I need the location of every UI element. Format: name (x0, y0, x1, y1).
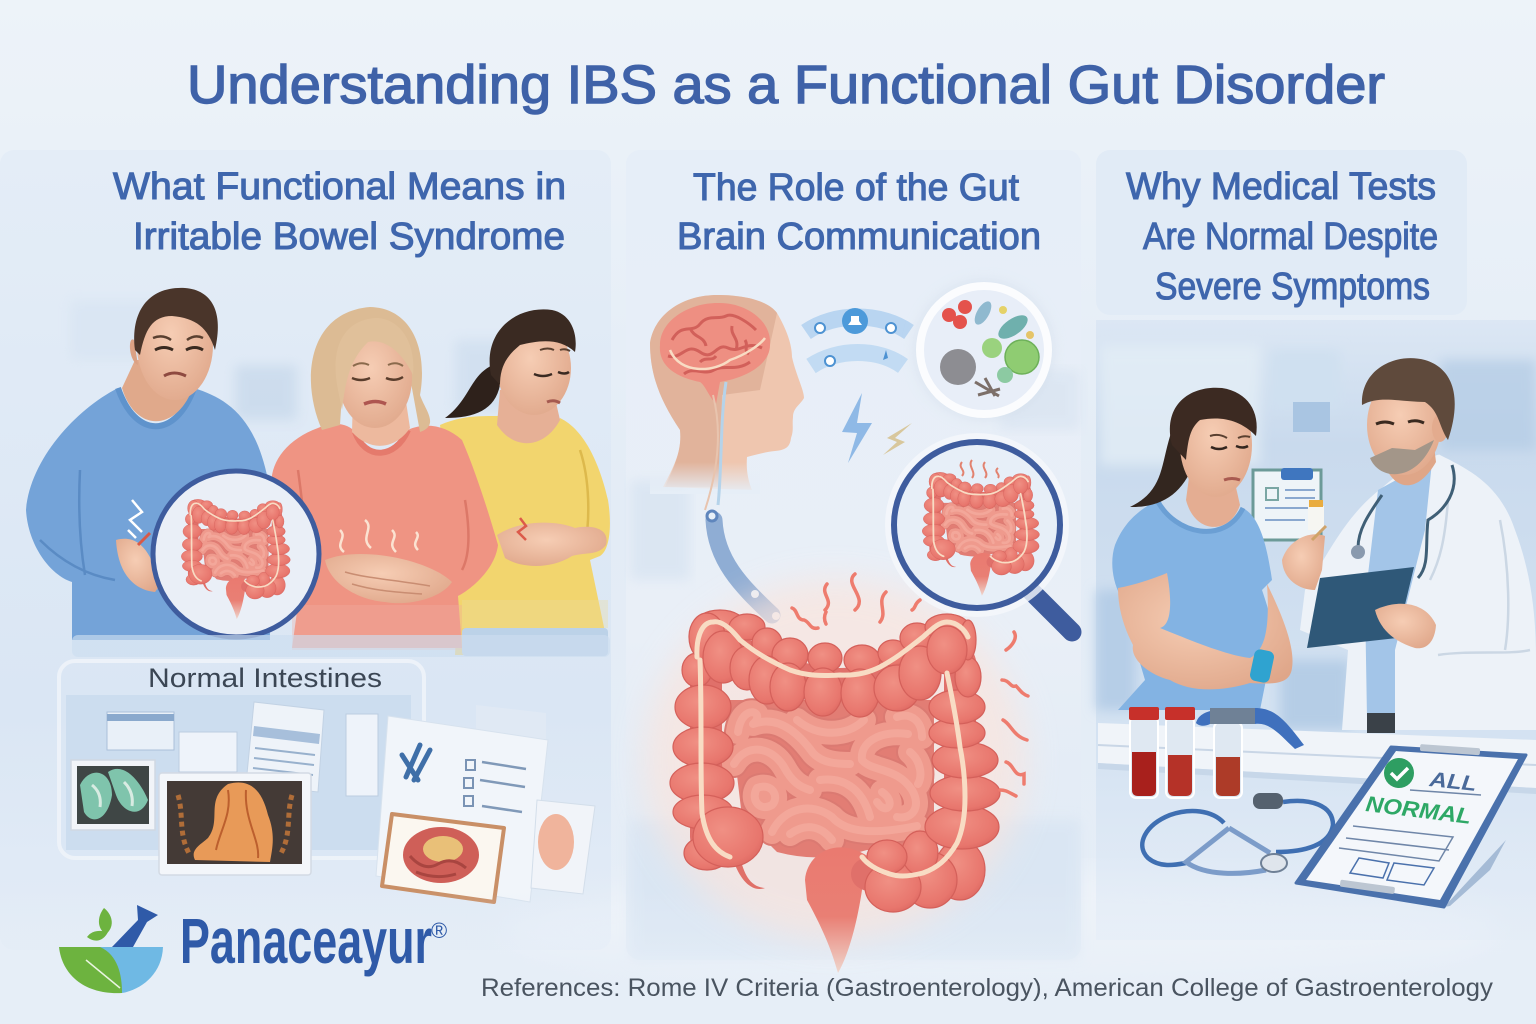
tube 2 (1165, 707, 1195, 798)
heading: right panel: Are Normal Despite (1143, 216, 1438, 258)
scan: green tissue image (71, 760, 155, 830)
figure: man in blue sweater (26, 288, 270, 640)
figure: woman in coral shirt (271, 307, 498, 650)
text: normal: NORMAL (1364, 791, 1473, 829)
icon: stethoscope (1142, 793, 1333, 873)
fade under figures (72, 635, 610, 657)
icon: heat squiggles (792, 574, 1028, 796)
references: References: Rome IV Criteria (Gastroenterology), American College of Gastroenterology (481, 974, 1494, 1002)
clipboard held by doctor (1307, 567, 1414, 648)
tube 1 (1129, 707, 1159, 798)
counter (1098, 723, 1536, 794)
icon: check mark (1384, 758, 1414, 788)
heading: left panel: Irritable Bowel Syndrome (133, 216, 565, 258)
scan: intestine photo card (382, 814, 504, 902)
panel: right column (1096, 150, 1536, 940)
wordmark: Panaceayur (180, 905, 432, 977)
arrows: brain-gut signals (806, 308, 909, 366)
title: Understanding IBS as a Functional Gut Disorder (187, 55, 1385, 115)
tube 3 (1214, 722, 1242, 798)
heading: middle panel: The Role of the Gut (693, 167, 1019, 209)
heading: left panel (113, 166, 566, 258)
wall chart: clinic clipboard (1253, 468, 1324, 540)
heading: middle panel (677, 167, 1041, 258)
text: all: ALL (1427, 768, 1478, 796)
icon: intestine badge (153, 471, 319, 637)
icon: lightning bolts (842, 393, 912, 463)
heading: middle panel: Brain Communication (677, 216, 1041, 258)
heading: right panel: Severe Symptoms (1155, 266, 1430, 308)
connector: gut-brain nerve (707, 511, 780, 620)
icon: blood test tubes (1129, 707, 1304, 798)
figure: doctor (1282, 358, 1536, 733)
heading: right panel: Why Medical Tests (1126, 166, 1436, 208)
icon: brain (660, 303, 770, 404)
figure: head profile with brain (650, 295, 804, 510)
icon: microbes circle (914, 280, 1054, 420)
figure: woman in yellow shirt (440, 309, 610, 656)
heading: right panel (1126, 166, 1438, 308)
documents: report sheets (107, 702, 595, 902)
illustration: large intestine (645, 580, 1025, 973)
arms crossed (1118, 573, 1293, 689)
label: normal intestines: Normal Intestines (148, 663, 382, 693)
panel: normal intestines reports (59, 661, 424, 858)
scan: tablet with orange colon image (159, 773, 311, 875)
logo: Panaceayur: ® (431, 918, 447, 943)
clipboard: all normal (1296, 744, 1526, 907)
logo: Panaceayur (59, 905, 447, 993)
heading: left panel: What Functional Means in (113, 166, 566, 208)
icon: mortar and pestle (59, 905, 163, 993)
panel: middle column (626, 150, 1081, 960)
blood pressure bulb (1196, 708, 1304, 749)
bottom mist (0, 890, 1536, 1024)
panel: left column (0, 150, 611, 950)
figure: patient woman (1112, 388, 1293, 710)
icon: magnifying glass with intestine (885, 433, 1072, 632)
